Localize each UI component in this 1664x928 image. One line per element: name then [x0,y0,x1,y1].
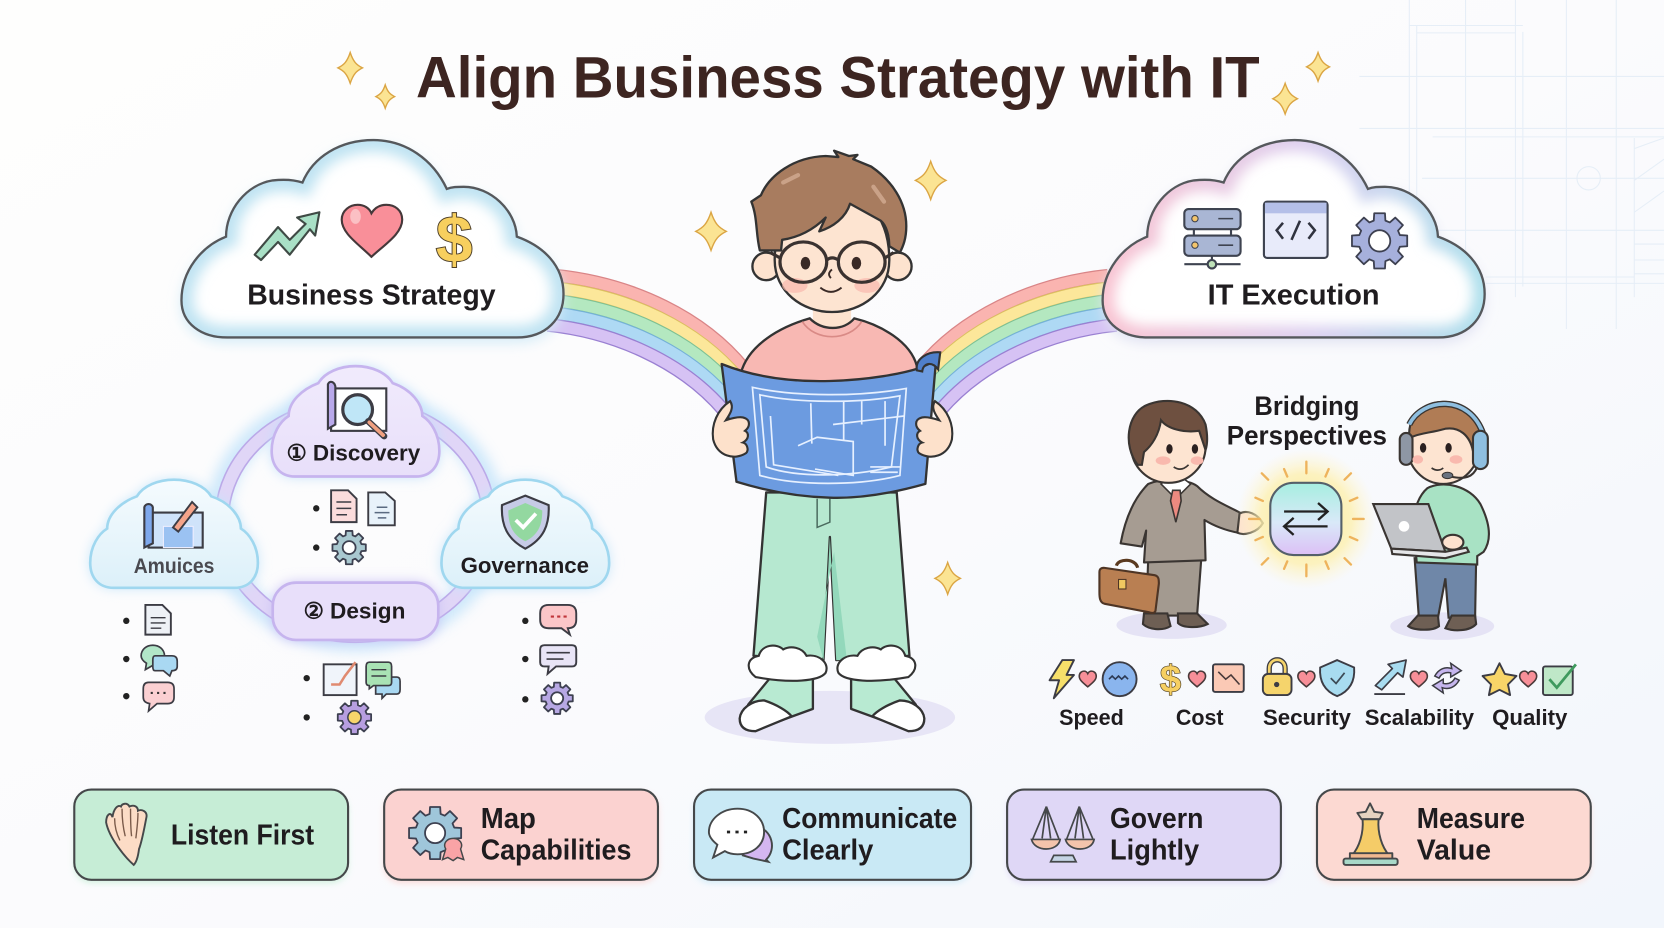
swap icon with glow [1236,449,1376,589]
icon: gear [1352,213,1407,269]
fluffy cuffs [749,646,915,681]
label: Business Strategy [247,280,496,312]
hair [751,151,906,253]
panel: delivery cycle [90,366,609,734]
heading [1227,391,1387,451]
neck [813,302,851,332]
panel: principle cards [74,790,1591,883]
icon: heart [342,205,402,257]
icon: gear [409,807,464,861]
icon: growth arrow [255,212,319,260]
ears [752,253,912,280]
governance cloud [441,480,609,588]
metric: quality [1483,663,1576,730]
shirt [741,318,919,393]
character with blueprint [696,151,960,744]
metric: speed: Speed [1059,705,1124,730]
metric: cost [1160,658,1244,730]
blueprint grid background [1359,0,1664,329]
card: measure value: Measure [1417,803,1525,835]
bullets governance [522,605,576,714]
label: ① Discovery [287,441,421,466]
shoes [740,675,924,731]
card: map capabilities: Capabilities [481,835,631,867]
title sparkles [338,53,1330,114]
panel: IT execution cloud [1103,140,1485,343]
metric: cost: $ [1160,658,1181,701]
metric: speed [1050,660,1137,730]
card: communicate clearly: Communicate [782,803,957,835]
metric: security [1263,660,1354,730]
metric: scalability [1365,660,1475,730]
metric: scalability: Scalability [1365,705,1475,730]
label: Governance [461,553,589,578]
card: govern lightly: Lightly [1110,835,1199,867]
design pill: ② Design [304,599,405,624]
briefcase [1099,560,1159,613]
cycle ring [218,400,493,640]
metric: security: Security [1263,705,1352,730]
ground shadow [705,691,955,744]
card: communicate clearly: Clearly [782,835,873,867]
heading: Bridging [1254,391,1359,421]
icon: blueprint with pencil [144,502,203,548]
card: map capabilities [384,790,658,883]
icon: shield [502,496,549,549]
icon: server [1184,209,1241,268]
panel: bridging perspectives [1050,391,1576,730]
icon: hand [106,804,147,865]
metric: cost: Cost [1176,705,1224,730]
metric: quality: Quality [1492,705,1568,730]
face [775,189,889,312]
panel: business strategy cloud [181,140,564,343]
card: listen first: Listen First [171,820,315,852]
trousers [753,492,909,660]
card: govern lightly: Govern [1110,803,1203,835]
card: map capabilities: Map [481,803,536,835]
blueprint sheet [722,352,940,498]
business person [1099,401,1263,639]
rainbow right [920,276,1116,411]
cheeks [782,278,880,293]
title: Align Business Strategy with IT [416,46,1260,111]
heading: Perspectives [1227,421,1387,451]
card: measure value: Value [1417,835,1491,867]
bullets left [123,605,177,711]
card: listen first [74,790,348,883]
hands [713,401,952,457]
icon: speech bubbles [709,809,772,862]
card: govern lightly [1007,790,1281,883]
label: IT Execution [1208,280,1380,312]
sparkles [696,161,960,594]
glasses [770,242,894,282]
icon: chess piece [1344,803,1398,865]
eyes and smile [801,257,861,292]
laptop [1373,504,1469,558]
card: communicate clearly [694,790,971,883]
design pill [273,583,438,640]
icon: dollar: $ [436,202,473,276]
rainbow left [548,276,744,411]
icon: code window [1264,202,1328,258]
bullets discovery [313,490,395,564]
card: measure value [1317,790,1591,883]
label: Amuices [134,555,214,578]
icon: scales [1032,807,1094,862]
left cloud [90,480,258,588]
discovery cloud [272,366,439,476]
icon: blueprint with magnifier [328,382,386,436]
IT person [1373,402,1494,640]
bullets design [304,662,400,734]
